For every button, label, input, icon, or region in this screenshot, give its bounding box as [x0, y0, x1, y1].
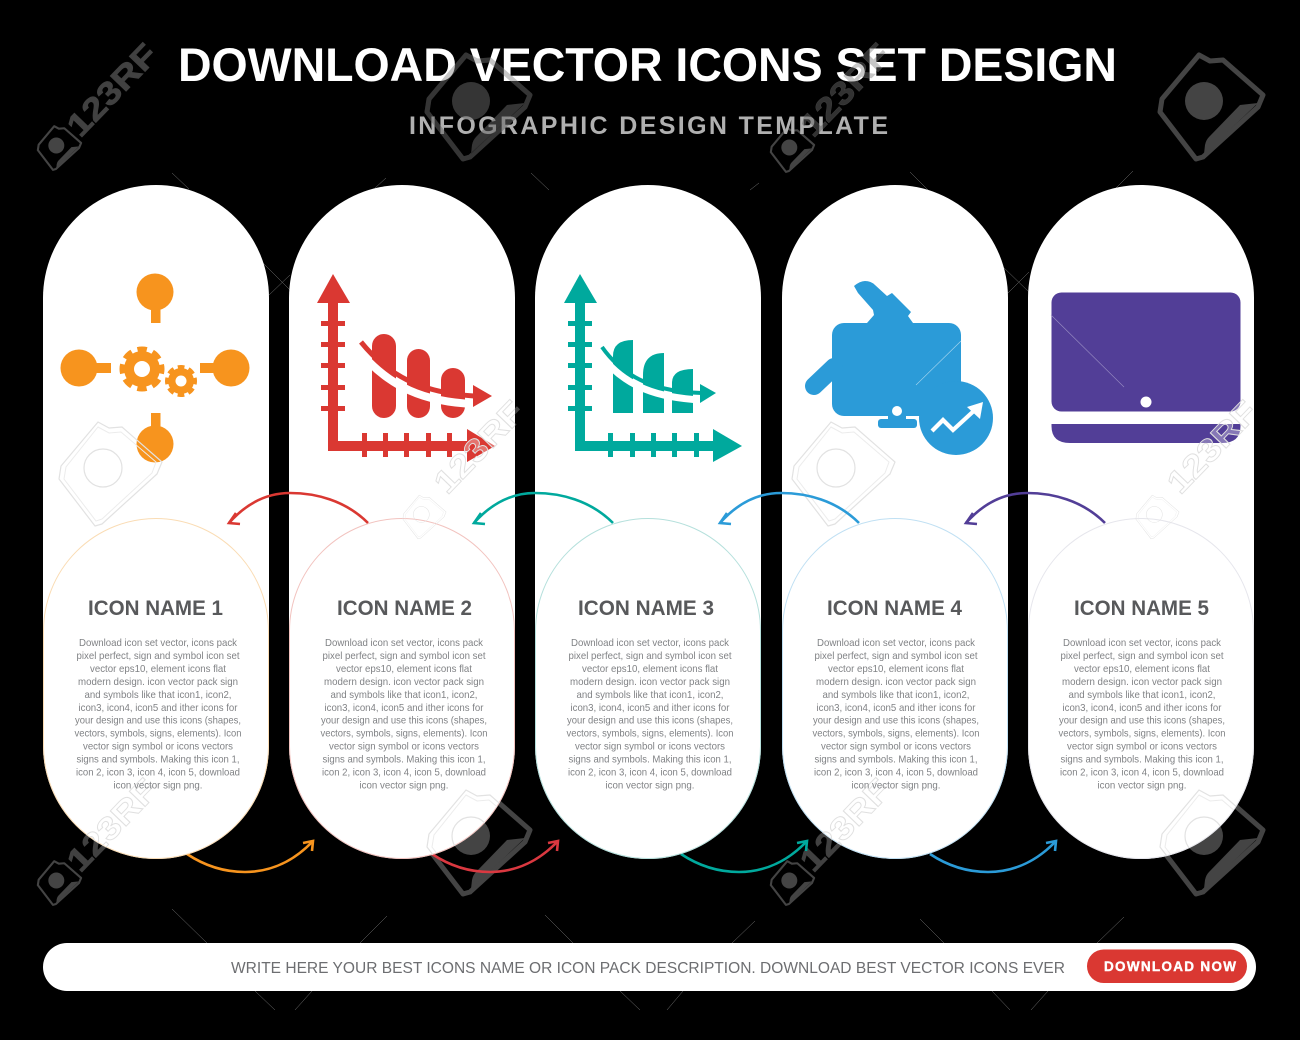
download button: DOWNLOAD NOW [1104, 959, 1236, 974]
text block: icon name 5: your design and use this icons (shapes, [1059, 716, 1225, 726]
text block: icon name 4: icon vector sign png. [852, 780, 940, 792]
icon: gears with four nodes [60, 274, 250, 462]
text block: icon name 5: signs and symbols. Making this icon 1, [1060, 754, 1224, 766]
text block: icon name 2: vector sign symbol or icons vectors [329, 742, 479, 752]
text block: icon name 1 [74, 597, 242, 792]
watermark: lower rows on black: 123RF [59, 771, 165, 879]
text block: icon name 5: icon vector sign png. [1098, 780, 1186, 792]
watermark: top row on black: 123RF [59, 36, 165, 144]
text block: icon name 5: icon3, icon4, icon5 and ither icons for [1062, 703, 1222, 714]
text block: icon name 4: vector sign symbol or icons vectors [821, 742, 971, 752]
watermark: lower rows on black: 123RF [792, 771, 898, 879]
text block: icon name 2 [320, 597, 488, 792]
text block: icon name 5: Download icon set vector, icons pack [1063, 638, 1222, 649]
text block: icon name 3: vector eps10, element icons flat [582, 664, 718, 675]
icon: blue monitor with brush and growth badge [814, 281, 993, 455]
text block: icon name 4: Download icon set vector, icons pack [817, 638, 976, 649]
text block: icon name 3: vectors, symbols, signs, elements). Icon [566, 728, 734, 740]
text block: icon name 1: icon vector sign png. [114, 780, 202, 792]
title: DOWNLOAD VECTOR ICONS SET DESIGN [178, 39, 1117, 92]
text block: icon name 3: and symbols like that icon1, icon2, [576, 690, 724, 701]
text block: icon name 4: icon 2, icon 3, icon 4, icon 5, download [814, 768, 978, 778]
text block: icon name 3: pixel perfect, sign and symbol icon set [568, 651, 732, 662]
text block: icon name 1: icon 2, icon 3, icon 4, icon 5, download [76, 768, 240, 778]
text block: icon name 3: Download icon set vector, icons pack [571, 638, 730, 649]
arrow: step 1 to 2 [187, 841, 313, 872]
text block: icon name 2: vector eps10, element icons flat [336, 664, 472, 675]
text block: icon name 1: your design and use this icons (shapes, [75, 716, 241, 726]
text block: icon name 3: your design and use this icons (shapes, [567, 716, 733, 726]
text block: icon name 2: icon vector sign png. [360, 780, 448, 792]
text block: icon name 2: Download icon set vector, icons pack [325, 638, 484, 649]
watermark: dimming overlay on title [427, 36, 898, 159]
text block: icon name 5: modern design. icon vector pack sign [1062, 677, 1222, 688]
outline: text area 3 [536, 518, 760, 858]
panel: pill 4 [782, 185, 1008, 859]
text block: icon name 4: your design and use this icons (shapes, [813, 716, 979, 726]
text block: icon name 2: modern design. icon vector pack sign [324, 677, 484, 688]
text block: icon name 5: vector eps10, element icons flat [1074, 664, 1210, 675]
text block: icon name 3: icon3, icon4, icon5 and ither icons for [570, 703, 730, 714]
text block: icon name 3 [566, 597, 734, 792]
text block: icon name 4: ICON NAME 4 [827, 597, 962, 620]
text block: icon name 2: and symbols like that icon1, icon2, [330, 690, 478, 701]
subtitle: INFOGRAPHIC DESIGN TEMPLATE [409, 112, 888, 140]
text block: icon name 4: and symbols like that icon1, icon2, [822, 690, 970, 701]
text block: icon name 5: and symbols like that icon1, icon2, [1068, 690, 1216, 701]
text block: icon name 5: icon 2, icon 3, icon 4, icon 5, download [1060, 768, 1224, 778]
outline: text area 2 [290, 518, 514, 858]
text block: icon name 3: signs and symbols. Making this icon 1, [568, 754, 732, 766]
outline: text area 5 [1028, 518, 1254, 858]
outline: text area 1 [44, 518, 268, 858]
arrow: step 2 to 3 [432, 841, 558, 872]
text block: icon name 1: Download icon set vector, icons pack [79, 638, 238, 649]
watermark: top row on black: 123RF [792, 36, 898, 144]
text block: icon name 1: signs and symbols. Making this icon 1, [76, 754, 240, 766]
watermark: light overlay on pills: 123RF [1159, 393, 1265, 501]
footer text: WRITE HERE YOUR BEST ICONS NAME OR ICON PACK DESCRIPTION. DOWNLOAD BEST VECTOR ICONS EVER [231, 960, 1065, 977]
text block: icon name 1: vector eps10, element icons flat [90, 664, 226, 675]
arrow: step 2 back to 1 [229, 493, 368, 524]
watermark: light overlay on pills: 123RF [792, 771, 898, 879]
download button [1087, 950, 1247, 983]
watermark: dimming overlay on title: 123RF [792, 36, 898, 144]
text block: icon name 4: vector eps10, element icons flat [828, 664, 964, 675]
text block: icon name 1: icon3, icon4, icon5 and ither icons for [78, 703, 238, 714]
panel: pill 5 [1028, 185, 1254, 859]
text block: icon name 3: modern design. icon vector pack sign [570, 677, 730, 688]
text block: icon name 3: icon 2, icon 3, icon 4, icon 5, download [568, 768, 732, 778]
text block: icon name 4 [812, 597, 980, 792]
watermark: light overlay on pills [59, 393, 1265, 894]
text block: icon name 5: pixel perfect, sign and symbol icon set [1060, 651, 1224, 662]
text block: icon name 2: signs and symbols. Making this icon 1, [322, 754, 486, 766]
text block: icon name 2: ICON NAME 2 [337, 597, 472, 620]
arrow: step 5 back to 4 [966, 493, 1105, 524]
watermark: lower rows on black [38, 393, 1265, 905]
text block: icon name 4: vectors, symbols, signs, elements). Icon [812, 728, 980, 740]
text block: icon name 5: ICON NAME 5 [1074, 597, 1209, 620]
text block: icon name 4: modern design. icon vector pack sign [816, 677, 976, 688]
text block: icon name 5: vector sign symbol or icons vectors [1067, 742, 1217, 752]
text block: icon name 2: pixel perfect, sign and symbol icon set [322, 651, 486, 662]
watermark: lower rows on black: 123RF [426, 393, 532, 501]
arrow: step 4 to 5 [930, 841, 1056, 872]
panel: pill 3 [535, 185, 761, 859]
text block: icon name 3: vector sign symbol or icons vectors [575, 742, 725, 752]
text block: icon name 2: icon3, icon4, icon5 and ither icons for [324, 703, 484, 714]
text block: icon name 1: ICON NAME 1 [88, 597, 223, 620]
panel: pill 1 [43, 185, 269, 859]
text block: icon name 4: signs and symbols. Making this icon 1, [814, 754, 978, 766]
text block: icon name 1: vectors, symbols, signs, elements). Icon [74, 728, 242, 740]
text block: icon name 5 [1058, 597, 1226, 792]
icon: teal falling bar chart [564, 274, 742, 462]
icon: purple laptop [1051, 292, 1240, 443]
text block: icon name 1: vector sign symbol or icons vectors [83, 742, 233, 752]
text block: icon name 2: icon 2, icon 3, icon 4, icon 5, download [322, 768, 486, 778]
text block: icon name 3: icon vector sign png. [606, 780, 694, 792]
text block: icon name 5: vectors, symbols, signs, elements). Icon [1058, 728, 1226, 740]
watermark: top row on black [38, 36, 1263, 172]
arrow: step 3 to 4 [681, 841, 807, 872]
watermark: light overlay on pills: 123RF [426, 393, 532, 501]
text block: icon name 4: icon3, icon4, icon5 and ither icons for [816, 703, 976, 714]
text block: icon name 4: pixel perfect, sign and symbol icon set [814, 651, 978, 662]
icon: red falling bar chart [317, 274, 495, 462]
arrow: step 4 back to 3 [720, 493, 859, 524]
watermark: light overlay on pills: 123RF [59, 771, 165, 879]
text block: icon name 1: modern design. icon vector pack sign [78, 677, 238, 688]
outline: text area 4 [782, 518, 1008, 858]
arrow: step 3 back to 2 [474, 493, 613, 524]
text block: icon name 2: vectors, symbols, signs, elements). Icon [320, 728, 488, 740]
watermark: lower rows on black: 123RF [1159, 393, 1265, 501]
text block: icon name 1: pixel perfect, sign and symbol icon set [76, 651, 240, 662]
text block: icon name 2: your design and use this icons (shapes, [321, 716, 487, 726]
text block: icon name 3: ICON NAME 3 [578, 597, 714, 620]
footer banner [43, 943, 1256, 991]
text block: icon name 1: and symbols like that icon1, icon2, [84, 690, 232, 701]
panel: pill 2 [289, 185, 515, 859]
